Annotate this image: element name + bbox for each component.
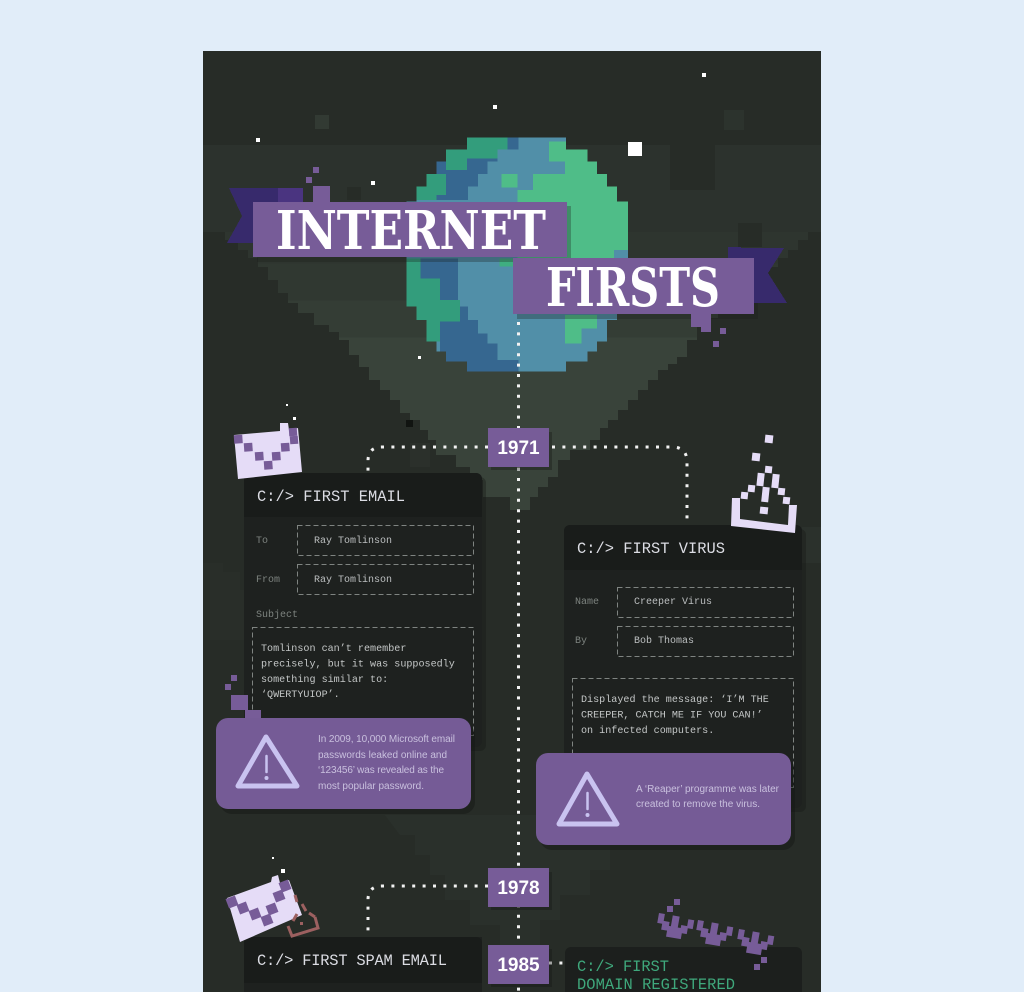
timeline: branch to first domain <box>549 962 565 964</box>
field: by <box>575 626 794 656</box>
field: from: From <box>256 575 280 586</box>
field: subject: Subject <box>256 609 298 621</box>
icon: white pixel stars <box>256 73 706 420</box>
icon: envelope 1971 <box>234 423 302 479</box>
panel: first domain card <box>565 947 802 992</box>
field: name: Creeper Virus <box>634 596 712 608</box>
callout: reaper programme <box>536 753 795 850</box>
field: subject: precisely, but it was supposedly <box>261 658 455 670</box>
timeline: branch to first spam <box>368 886 488 932</box>
field: subject: Tomlinson can’t remember <box>261 643 406 655</box>
year label: 1985: 1985 <box>497 955 540 976</box>
callout text: created to remove the virus. <box>636 799 760 810</box>
timeline: branch to first virus <box>552 447 687 525</box>
field: name: Name <box>575 597 599 608</box>
title ribbon: internet <box>227 167 571 262</box>
callout text: ‘123456’ was revealed as the <box>318 765 444 776</box>
callout text: In 2009, 10,000 Microsoft email <box>318 734 455 745</box>
icon: pixel warning sign <box>731 435 797 533</box>
year label: 1978: 1978 <box>497 878 540 899</box>
field: to: Ray Tomlinson <box>314 535 392 547</box>
callout text <box>318 734 455 792</box>
heading: first email: C:/> FIRST EMAIL <box>257 488 405 506</box>
timeline: dotted vertical line <box>517 322 520 992</box>
timeline: branch to first email <box>368 447 488 473</box>
field: from <box>256 564 474 594</box>
panel: dark poster background <box>203 51 821 992</box>
field: subject: something similar to: <box>261 674 388 686</box>
heading: first domain registered: C:/> FIRST <box>577 958 669 976</box>
year label: 1971: 1971 <box>497 438 540 459</box>
title text: internet: INTERNET <box>276 200 546 262</box>
title ribbon: firsts <box>513 247 787 347</box>
callout text <box>636 784 780 810</box>
field: to: To <box>256 536 268 547</box>
field: subject <box>252 609 474 736</box>
field: by: Bob Thomas <box>634 635 694 647</box>
title text: firsts: FIRSTS <box>546 257 720 319</box>
icon: warning triangle <box>238 737 297 786</box>
icon: small red warning sign <box>288 895 318 936</box>
field: name <box>575 588 794 618</box>
field: message: Displayed the message: ‘I’M THE <box>581 694 769 706</box>
field: message: CREEPER, CATCH ME IF YOU CAN!’ <box>581 710 763 722</box>
callout text: passwords leaked online and <box>318 750 447 761</box>
year label: 1978 <box>488 868 552 910</box>
field: subject: ‘QWERTYUIOP’. <box>261 689 340 701</box>
field: to <box>256 526 474 556</box>
icon: warning triangle <box>559 774 617 824</box>
icon: purple www pixel marks <box>655 899 774 970</box>
callout text: most popular password. <box>318 781 424 792</box>
field: message <box>572 678 794 788</box>
heading: first spam email: C:/> FIRST SPAM EMAIL <box>257 952 447 970</box>
callout text: A ‘Reaper’ programme was later <box>636 784 780 795</box>
callout: password leak <box>216 675 475 814</box>
field: from: Ray Tomlinson <box>314 574 392 586</box>
globe <box>407 137 628 372</box>
year label: 1971 <box>488 428 552 470</box>
field: by: By <box>575 636 587 647</box>
panel: first email card <box>244 473 486 751</box>
field: message: on infected computers. <box>581 725 714 737</box>
year label: 1985 <box>488 945 552 987</box>
heading: first domain registered <box>577 958 735 992</box>
heading: first virus: C:/> FIRST VIRUS <box>577 540 725 558</box>
panel: first virus card <box>564 525 806 812</box>
panel: first spam email card <box>244 937 482 992</box>
icon: tilted envelope 1978 <box>226 857 302 942</box>
